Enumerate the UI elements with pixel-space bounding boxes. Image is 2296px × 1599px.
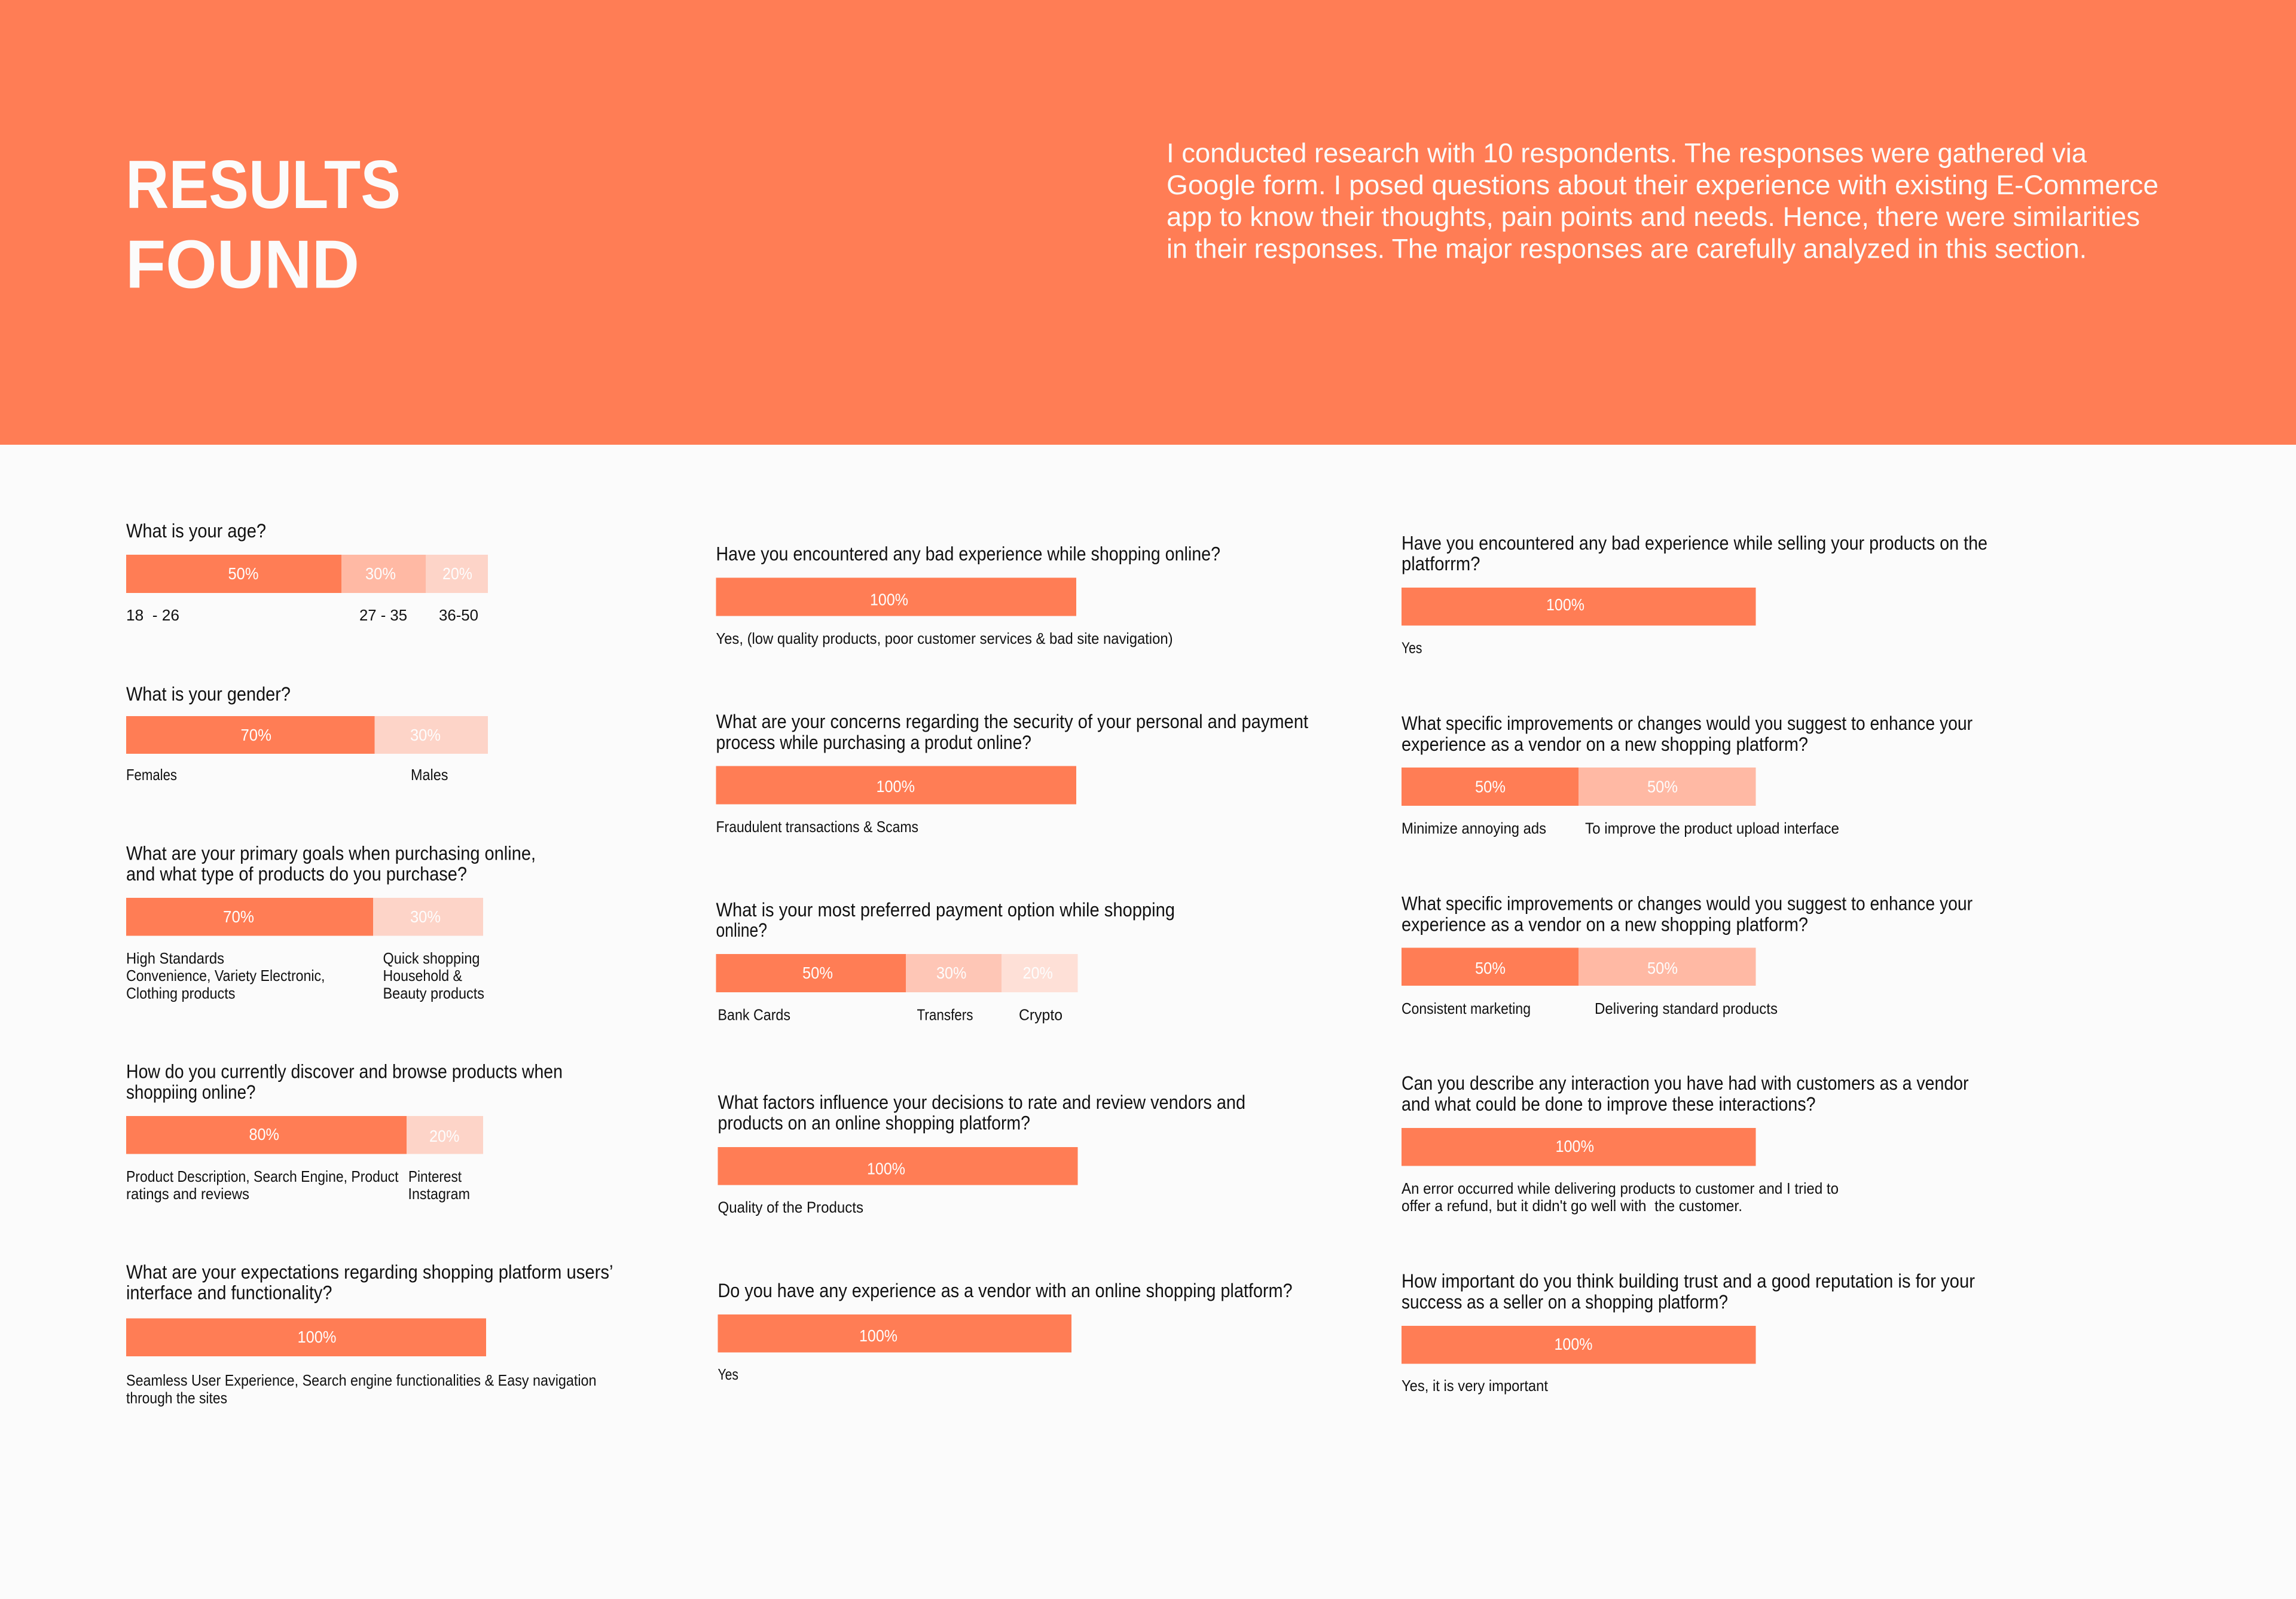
answer labels bbox=[126, 1371, 597, 1407]
bar bbox=[126, 1319, 486, 1356]
answer labels: 18 - 26 bbox=[126, 606, 179, 624]
question bbox=[1402, 1072, 1969, 1115]
panel: security concerns question bbox=[716, 711, 1308, 836]
stacked bar bbox=[126, 1116, 483, 1154]
bar bbox=[718, 1314, 1071, 1352]
question: products on an online shopping platform? bbox=[718, 1112, 1030, 1133]
question bbox=[1402, 713, 1973, 755]
bar bbox=[716, 577, 1076, 616]
answer label bbox=[1402, 1179, 1839, 1215]
answer labels: Bank Cards bbox=[718, 1005, 790, 1023]
question bbox=[126, 1261, 613, 1303]
question bbox=[1402, 532, 1987, 574]
answer labels: Minimize annoying ads bbox=[1402, 819, 1546, 837]
stacked bar bbox=[126, 555, 488, 593]
stacked bar: 30% bbox=[936, 964, 966, 982]
question: experience as a vendor on a new shopping platform? bbox=[1402, 733, 1808, 755]
question: experience as a vendor on a new shopping platform? bbox=[1402, 913, 1808, 935]
panel: age question bbox=[126, 520, 488, 624]
stacked bar bbox=[126, 898, 483, 936]
question: Have you encountered any bad experience while shopping online? bbox=[716, 543, 1220, 564]
answer labels: Transfers bbox=[917, 1005, 973, 1023]
answer labels: Instagram bbox=[408, 1185, 470, 1203]
panel: rating factors question bbox=[718, 1092, 1245, 1216]
stacked bar: 70% bbox=[240, 726, 271, 744]
bar bbox=[716, 766, 1076, 805]
answer labels: Pinterest bbox=[408, 1167, 462, 1185]
panel: bad selling experience question bbox=[1402, 532, 1987, 656]
question bbox=[126, 1060, 563, 1103]
stacked bar: 50% bbox=[1647, 959, 1678, 977]
answer label: offer a refund, but it didn't go well with the customer. bbox=[1402, 1197, 1742, 1215]
panel: primary goals question bbox=[126, 843, 536, 1002]
question: Do you have any experience as a vendor with an online shopping platform? bbox=[718, 1280, 1293, 1301]
answer labels bbox=[126, 949, 484, 1002]
answer labels: Household & bbox=[383, 967, 462, 985]
stacked bar: 20% bbox=[429, 1127, 459, 1145]
question: What factors influence your decisions to rate and review vendors and bbox=[718, 1092, 1245, 1113]
question: What specific improvements or changes would you suggest to enhance your bbox=[1402, 893, 1973, 915]
panel: expectations question bbox=[126, 1261, 613, 1407]
answer label: Quality of the Products bbox=[718, 1198, 863, 1216]
stacked bar: 80% bbox=[249, 1125, 279, 1144]
answer labels: 27 - 35 bbox=[359, 606, 407, 624]
stacked bar: 50% bbox=[802, 964, 833, 982]
answer labels: 36-50 bbox=[439, 606, 478, 624]
answer labels: through the sites bbox=[126, 1389, 227, 1407]
stacked bar: 50% bbox=[1475, 959, 1506, 977]
bar: 100% bbox=[298, 1328, 336, 1346]
answer labels: Males bbox=[411, 766, 448, 784]
bar: 100% bbox=[877, 777, 915, 796]
stacked bar bbox=[126, 716, 488, 754]
answer labels: To improve the product upload interface bbox=[1585, 819, 1839, 837]
question: success as a seller on a shopping platform? bbox=[1402, 1291, 1728, 1313]
intro paragraph: app to know their thoughts, pain points and needs. Hence, there were similarities bbox=[1167, 201, 2140, 232]
question: What are your expectations regarding shopping platform users’ bbox=[126, 1261, 613, 1283]
stacked bar: 50% bbox=[1475, 777, 1506, 796]
answer labels: Clothing products bbox=[126, 984, 236, 1002]
panel: discover and browse question bbox=[126, 1060, 563, 1203]
answer labels: Beauty products bbox=[383, 984, 484, 1002]
answer labels: Consistent marketing bbox=[1402, 999, 1531, 1017]
bar bbox=[1402, 588, 1755, 625]
answer label: Yes bbox=[1402, 638, 1422, 656]
bar: 100% bbox=[1546, 595, 1584, 614]
answer labels: Product Description, Search Engine, Product bbox=[126, 1167, 399, 1185]
stacked bar: 70% bbox=[223, 907, 254, 926]
answer labels: High Standards bbox=[126, 949, 224, 967]
intro paragraph: I conducted research with 10 respondents. The responses were gathered via bbox=[1167, 137, 2087, 169]
answer labels bbox=[1402, 999, 1778, 1017]
panel: gender question bbox=[126, 683, 488, 784]
stacked bar bbox=[1402, 948, 1755, 986]
bar: 100% bbox=[1555, 1335, 1593, 1353]
stacked bar: 20% bbox=[1022, 964, 1053, 982]
answer labels: ratings and reviews bbox=[126, 1185, 249, 1203]
answer labels: Convenience, Variety Electronic, bbox=[126, 967, 325, 985]
answer label: Yes, it is very important bbox=[1402, 1377, 1549, 1395]
answer labels: Crypto bbox=[1019, 1005, 1062, 1023]
title bbox=[126, 147, 401, 302]
answer labels bbox=[1402, 819, 1839, 837]
stacked bar: 50% bbox=[1647, 777, 1678, 796]
bar bbox=[1402, 1128, 1755, 1166]
bar bbox=[718, 1147, 1077, 1185]
answer labels: Delivering standard products bbox=[1595, 999, 1778, 1017]
answer label: Yes, (low quality products, poor customer services & bad site navigation) bbox=[716, 629, 1173, 647]
question: How important do you think building trust and a good reputation is for your bbox=[1402, 1270, 1975, 1292]
question: platforrm? bbox=[1402, 553, 1480, 574]
question: and what type of products do you purchase? bbox=[126, 863, 467, 885]
answer labels: Seamless User Experience, Search engine functionalities & Easy navigation bbox=[126, 1371, 597, 1389]
intro paragraph: Google form. I posed questions about their experience with existing E-Commerce bbox=[1167, 170, 2158, 200]
question: Can you describe any interaction you have had with customers as a vendor bbox=[1402, 1072, 1969, 1094]
answer labels bbox=[126, 766, 448, 784]
question: What is your age? bbox=[126, 520, 266, 542]
bar bbox=[1402, 1326, 1755, 1364]
panel: vendor improvements question 2 bbox=[1402, 893, 1973, 1017]
answer labels bbox=[126, 1167, 470, 1203]
answer label: Yes bbox=[718, 1365, 738, 1383]
question: What is your gender? bbox=[126, 683, 291, 705]
question bbox=[718, 1092, 1245, 1133]
bar: 100% bbox=[870, 591, 908, 609]
stacked bar bbox=[1402, 768, 1755, 806]
title: RESULTS bbox=[126, 147, 401, 223]
panel: vendor improvements question 1 bbox=[1402, 713, 1973, 837]
stacked bar: 30% bbox=[410, 907, 441, 926]
intro paragraph: in their responses. The major responses are carefully analyzed in this section. bbox=[1167, 233, 2087, 264]
question: What are your concerns regarding the security of your personal and payment bbox=[716, 711, 1308, 732]
answer labels bbox=[126, 606, 478, 624]
question bbox=[1402, 893, 1973, 935]
question: shoppiing online? bbox=[126, 1081, 256, 1103]
panel: bad shopping experience question bbox=[716, 543, 1220, 647]
question: What are your primary goals when purchasing online, bbox=[126, 843, 536, 864]
question: What specific improvements or changes would you suggest to enhance your bbox=[1402, 713, 1973, 734]
answer label: Fraudulent transactions & Scams bbox=[716, 818, 918, 836]
question: Have you encountered any bad experience while selling your products on the bbox=[1402, 532, 1987, 554]
bar: 100% bbox=[1556, 1137, 1594, 1155]
stacked bar: 30% bbox=[410, 726, 441, 744]
bar: 100% bbox=[859, 1326, 897, 1345]
question bbox=[716, 899, 1175, 941]
panel: vendor experience question bbox=[718, 1280, 1293, 1383]
stacked bar bbox=[716, 954, 1077, 992]
stacked bar: 30% bbox=[365, 564, 396, 583]
question: What is your most preferred payment option while shopping bbox=[716, 899, 1175, 921]
intro paragraph bbox=[1167, 137, 2158, 264]
panel: trust and reputation question bbox=[1402, 1270, 1975, 1395]
answer labels: Females bbox=[126, 766, 177, 784]
question: and what could be done to improve these interactions? bbox=[1402, 1093, 1815, 1115]
bar: 100% bbox=[867, 1160, 905, 1178]
question: How do you currently discover and browse products when bbox=[126, 1060, 563, 1082]
stacked bar: 50% bbox=[228, 564, 258, 583]
question: process while purchasing a produt online? bbox=[716, 732, 1031, 753]
panel: payment option question bbox=[716, 899, 1175, 1023]
answer label: An error occurred while delivering products to customer and I tried to bbox=[1402, 1179, 1839, 1197]
stacked bar: 20% bbox=[442, 564, 472, 583]
panel: customer interaction question bbox=[1402, 1072, 1969, 1215]
title: FOUND bbox=[126, 227, 359, 302]
answer labels: Quick shopping bbox=[383, 949, 480, 967]
answer labels bbox=[718, 1005, 1062, 1023]
question bbox=[1402, 1270, 1975, 1313]
question: online? bbox=[716, 919, 767, 941]
question bbox=[126, 843, 536, 885]
question bbox=[716, 711, 1308, 753]
header banner bbox=[0, 0, 2296, 445]
question: interface and functionality? bbox=[126, 1282, 332, 1303]
